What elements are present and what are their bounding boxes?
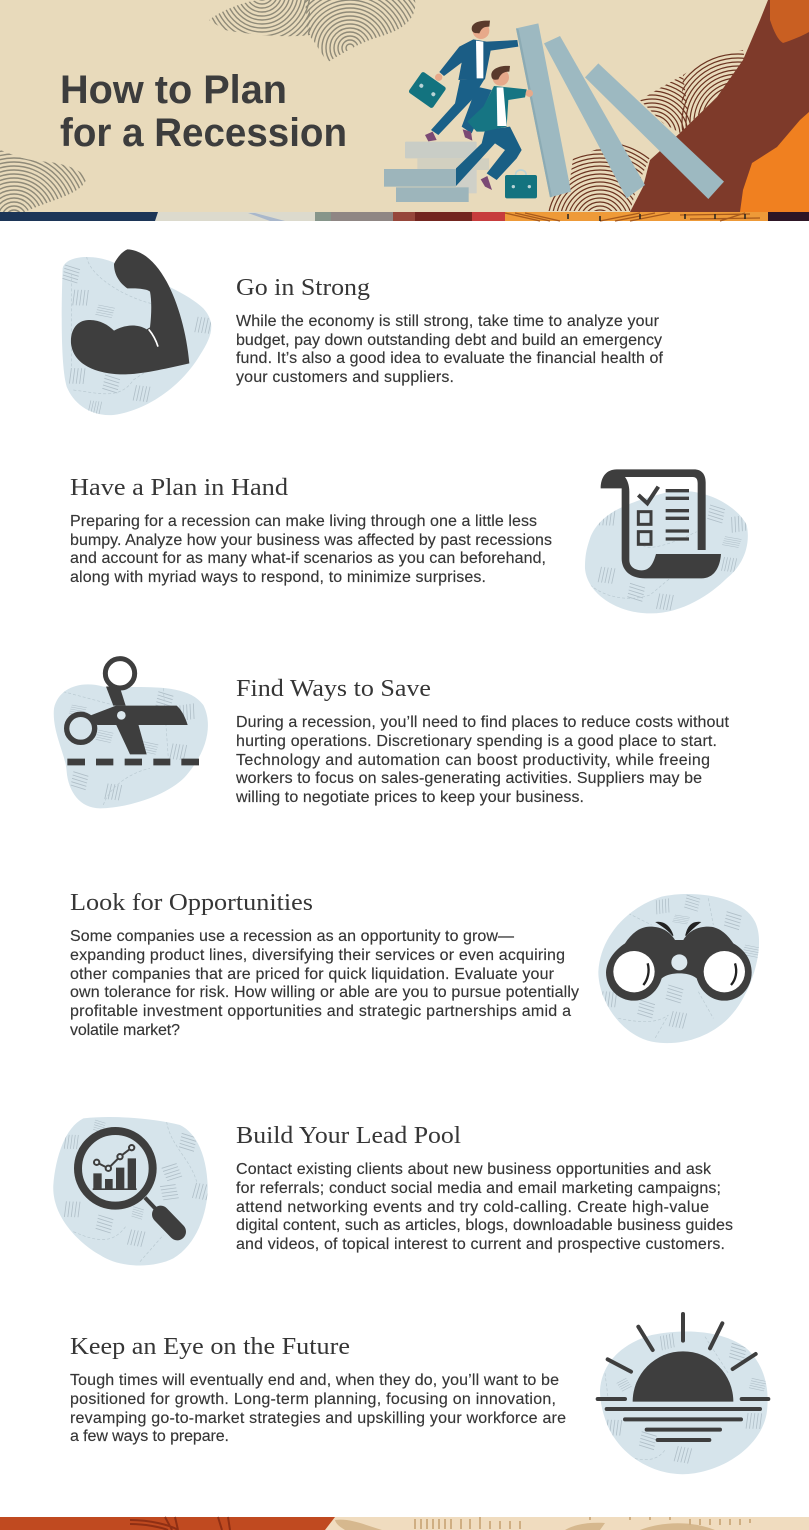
body text: During a recession, you’ll need to find places to reduce costs without	[236, 714, 730, 731]
body text	[70, 513, 552, 586]
body text	[70, 1372, 566, 1445]
body text: fund. It’s also a good idea to evaluate the financial health of	[236, 350, 664, 367]
body text: along with myriad ways to respond, to minimize surprises.	[70, 569, 486, 586]
body text: and account for as many what-if scenarios as you can beforehand,	[70, 550, 546, 567]
footer textured strip	[0, 1517, 809, 1530]
section 3: Find Ways to Save	[54, 659, 730, 808]
body text: budget, pay down outstanding debt and build an emergency	[236, 332, 662, 349]
body text	[236, 313, 664, 386]
icon: magnifying glass over chart on textured blob	[53, 1117, 211, 1265]
body text: positioned for growth. Long-term planning, focusing on innovation,	[70, 1391, 556, 1408]
body text	[235, 714, 730, 806]
body text: expanding product lines, diversifying their services or even acquiring	[70, 947, 565, 964]
title: How to Plan	[60, 68, 287, 112]
body text: profitable investment opportunities and strategic partnerships amid a	[70, 1003, 571, 1020]
illustration: two businessmen pushing	[408, 21, 537, 198]
heading: Have a Plan in Hand	[70, 475, 288, 501]
illustration: falling domino slabs	[516, 23, 724, 199]
icon: binoculars on textured blob	[598, 894, 761, 1043]
heading: Go in Strong	[236, 275, 370, 301]
body text: own tolerance for risk. How willing or able are you to pursue potentially	[70, 984, 579, 1001]
illustration: steps	[384, 142, 489, 202]
body text: Technology and automation can boost productivity, while freeing	[236, 752, 710, 769]
body text: your customers and suppliers.	[236, 369, 454, 386]
body text: volatile market?	[70, 1022, 180, 1039]
body text: revamping go-to-market strategies and upskilling your workforce are	[70, 1410, 566, 1427]
section 4: Look for Opportunities	[70, 890, 761, 1043]
body text: Some companies use a recession as an opportunity to grow—	[70, 928, 514, 945]
heading: Keep an Eye on the Future	[70, 1334, 350, 1360]
body text	[236, 1161, 733, 1253]
body text: Preparing for a recession can make living through one a little less	[70, 513, 537, 530]
textured colour strip	[0, 212, 809, 221]
title: for a Recession	[60, 111, 347, 155]
body text	[70, 928, 579, 1039]
icon: sun setting over horizon on textured blob	[598, 1314, 768, 1474]
heading: Find Ways to Save	[236, 676, 431, 702]
body text: a few ways to prepare.	[70, 1428, 229, 1445]
body text: for referrals; conduct social media and email marketing campaigns;	[236, 1180, 721, 1197]
section 2: Have a Plan in Hand	[70, 469, 750, 613]
body text: hurting operations. Discretionary spending is a good place to start.	[236, 733, 717, 750]
body text: Tough times will eventually end and, when they do, you’ll want to be	[70, 1372, 559, 1389]
body text: While the economy is still strong, take time to analyze your	[236, 313, 660, 330]
title	[60, 68, 347, 155]
body text: Contact existing clients about new business opportunities and ask	[236, 1161, 712, 1178]
icon: flexed arm on textured blob	[62, 249, 213, 415]
illustration: cliff	[630, 0, 809, 212]
body text: digital content, such as articles, blogs, downloadable business guides	[236, 1217, 733, 1234]
header banner	[0, 0, 809, 222]
body text: bumpy. Analyze how your business was affected by past recessions	[70, 532, 552, 549]
heading: Look for Opportunities	[70, 890, 313, 916]
icon: checklist scroll on textured blob	[585, 469, 750, 613]
fingerprint texture: bottom left	[0, 150, 86, 212]
section 6: Keep an Eye on the Future	[70, 1314, 768, 1474]
icon: scissors cutting dashed line on textured blob	[54, 659, 208, 808]
body text: and videos, of topical interest to current and prospective customers.	[236, 1236, 725, 1253]
body text: workers to focus on sales-generating activities. Suppliers may be	[235, 770, 702, 787]
fingerprint texture: brown behind dominoes	[548, 50, 744, 211]
heading: Build Your Lead Pool	[236, 1123, 461, 1149]
body text: attend networking events and try cold-calling. Create high-value	[236, 1199, 709, 1216]
fingerprint texture: top centre	[209, 0, 416, 62]
body text: other companies that are priced for quick liquidation. Evaluate your	[70, 966, 555, 983]
section 5: Build Your Lead Pool	[53, 1117, 733, 1265]
body text: willing to negotiate prices to keep your business.	[235, 789, 584, 806]
section 1: Go in Strong	[62, 249, 664, 415]
